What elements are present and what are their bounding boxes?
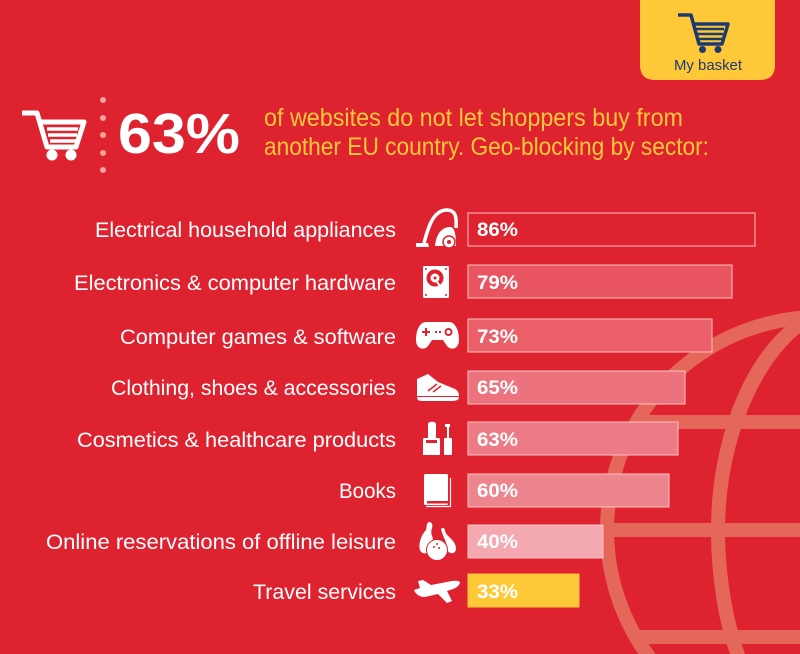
headline text: of websites do not let shoppers buy from: [264, 104, 683, 132]
bar values: 65%: [477, 378, 518, 399]
icon: white cart: [22, 113, 84, 160]
sector labels: Online reservations of offline leisure: [46, 531, 396, 554]
bar values: 73%: [477, 327, 518, 348]
dotted divider: [100, 97, 106, 173]
icon: vacuum cleaner: [416, 210, 456, 248]
icon: navy basket: [678, 15, 728, 53]
basket tab: [640, 0, 775, 80]
icon: cosmetics: [423, 422, 452, 455]
sector labels: [46, 219, 396, 604]
sector labels: Travel services: [253, 581, 396, 604]
sector labels: Clothing, shoes & accessories: [111, 377, 396, 400]
icons: [414, 210, 460, 603]
sector labels: Cosmetics & healthcare products: [77, 429, 396, 452]
background globe: [600, 311, 800, 654]
sector labels: Electronics & computer hardware: [74, 272, 396, 295]
bar values: 63%: [477, 430, 518, 451]
bar values: [477, 220, 518, 603]
sector labels: Computer games & software: [120, 326, 396, 349]
bar values: 40%: [477, 532, 518, 553]
icon: airplane: [414, 580, 460, 603]
icon: bowling: [419, 522, 456, 560]
icon: game controller: [416, 322, 459, 349]
bar values: 86%: [477, 220, 518, 241]
headline figure: 63%: [118, 102, 240, 166]
bar chart: [468, 213, 755, 607]
bar values: 33%: [477, 582, 518, 603]
headline text: another EU country. Geo-blocking by sector:: [264, 133, 709, 161]
basket label: My basket: [674, 57, 743, 74]
icon: book: [424, 474, 450, 506]
header: [22, 97, 709, 173]
icon: sneaker: [417, 374, 459, 401]
sector labels: Electrical household appliances: [95, 219, 396, 242]
headline text: [264, 104, 709, 161]
icon: hard drive: [423, 266, 449, 298]
bar values: 79%: [477, 273, 518, 294]
bar values: 60%: [477, 481, 518, 502]
sector labels: Books: [339, 480, 396, 503]
